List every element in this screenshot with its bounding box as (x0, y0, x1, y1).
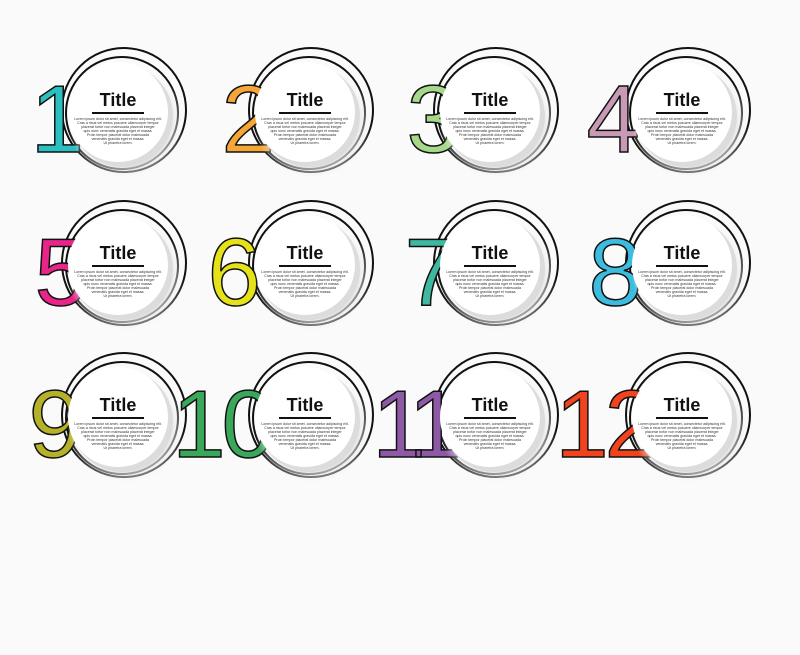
item 10 (172, 353, 373, 485)
item 10: 10 (172, 371, 272, 478)
item 5 (35, 201, 186, 333)
item 3: 3 (407, 66, 460, 173)
item 6 (208, 201, 373, 333)
item 5: 5 (35, 219, 88, 326)
item 11 (372, 353, 558, 485)
item 2: 2 (222, 66, 275, 173)
item 11: 11 (372, 371, 458, 478)
item 9 (29, 353, 186, 485)
item 4: 4 (587, 66, 640, 173)
item 1: 1 (31, 66, 84, 173)
item 8: 8 (589, 219, 642, 326)
item 1 (31, 48, 186, 180)
item 12 (555, 353, 750, 485)
item 7 (405, 201, 558, 333)
item 9: 9 (29, 371, 82, 478)
item 4 (587, 48, 750, 180)
item 2 (222, 48, 373, 180)
item 7: 7 (405, 219, 458, 326)
item 8 (589, 201, 750, 333)
item 3 (407, 48, 558, 180)
item 6: 6 (208, 219, 261, 326)
item 12: 12 (555, 371, 654, 478)
